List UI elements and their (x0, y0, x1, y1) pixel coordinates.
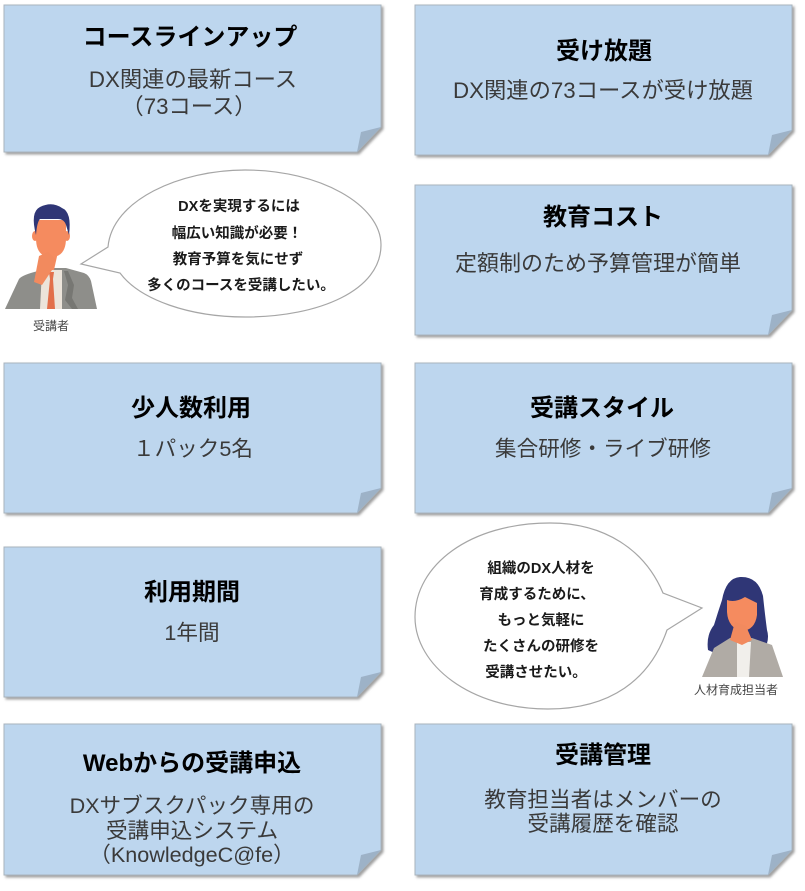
heading: attendance management: 受講管理 (555, 742, 651, 769)
icon: male learner (5, 204, 97, 309)
panel: learner speech (5, 170, 381, 333)
text: attendance management detail: 教育担当者はメンバーの (484, 787, 722, 812)
panel: attendance management (415, 724, 792, 875)
panel: course lineup (4, 5, 381, 152)
panel: attendance style (415, 363, 792, 513)
panel: web application (4, 724, 381, 875)
text: course lineup detail: （73コース） (121, 94, 257, 119)
panel: manager speech (415, 523, 783, 709)
heading: unlimited: 受け放題 (556, 38, 652, 65)
text: manager speech: 育成するために、 (479, 585, 595, 603)
panel: unlimited (415, 5, 792, 155)
panel: small group (4, 363, 381, 513)
text: learner speech: 多くのコースを受講したい。 (147, 276, 335, 294)
text: web application detail (70, 793, 314, 867)
heading: education cost: 教育コスト (543, 204, 663, 231)
heading: course lineup: コースラインアップ (83, 24, 297, 51)
panel: usage period (4, 547, 381, 697)
text: attendance management detail: 受講履歴を確認 (527, 811, 679, 836)
speech bubble: learner (81, 170, 381, 317)
text: web application detail: DXサブスクパック専用の (70, 793, 314, 818)
text: learner speech (147, 198, 335, 294)
text: manager speech: 受講させたい。 (485, 663, 587, 681)
text: manager speech: 組織のDX人材を (487, 560, 595, 577)
heading: usage period: 利用期間 (144, 579, 240, 606)
heading: web application: Webからの受講申込 (83, 750, 301, 777)
icon: female manager (702, 577, 783, 677)
text: small group detail: １パック5名 (133, 436, 253, 461)
text: manager speech: もっと気軽に (498, 611, 584, 629)
text: web application detail: （KnowledgeC@fe） (89, 842, 295, 867)
caption: learner: 受講者 (33, 319, 69, 333)
heading: small group: 少人数利用 (131, 395, 251, 422)
text: manager speech (479, 560, 599, 681)
heading: attendance style: 受講スタイル (530, 395, 674, 422)
text: unlimited detail: DX関連の73コースが受け放題 (453, 78, 753, 103)
text: attendance management detail (484, 787, 722, 836)
text: learner speech: DXを実現するには (178, 198, 300, 215)
text: learner speech: 教育予算を気にせず (173, 250, 303, 268)
text: education cost detail: 定額制のため予算管理が簡単 (455, 251, 741, 276)
speech bubble: manager (415, 523, 702, 709)
text: manager speech: たくさんの研修を (483, 637, 599, 655)
text: usage period detail: 1年間 (164, 620, 220, 645)
text: web application detail: 受講申込システム (106, 818, 278, 843)
text: course lineup detail (89, 67, 297, 119)
caption: manager: 人材育成担当者 (694, 682, 778, 697)
text: course lineup detail: DX関連の最新コース (89, 67, 297, 92)
panel: education cost (415, 185, 792, 335)
text: learner speech: 幅広い知識が必要！ (172, 224, 302, 242)
text: attendance style detail: 集合研修・ライブ研修 (495, 436, 711, 461)
